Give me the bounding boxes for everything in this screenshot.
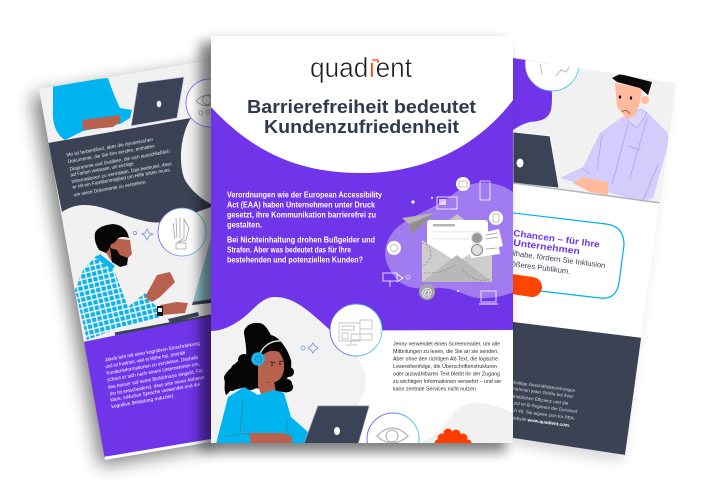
shape: grey bump bottom right: [418, 403, 513, 443]
text: Jenny paragraph: Jenny verwendet einen Screenreader, um alle: [393, 342, 500, 348]
logo: quadient: quadıent: [310, 52, 412, 83]
text: Jakob paragraph: ihn ist entscheidend, dass sein neuer Anbieter: [109, 375, 206, 397]
text: Jakob paragraph: Kundeninformationen zu verstehen. Deshalb: [106, 355, 199, 377]
text: Mo paragraph: er oft ein Familienmitglied um Hilfe bitten muss,: [72, 167, 171, 191]
illustration: woman with headset: [216, 323, 369, 444]
text: callout body: Teilhabe, fördern Sie Inklusion: [504, 248, 606, 270]
heading: Chancen: [514, 230, 600, 254]
text: Jenny paragraph: Lesereihenfolge, die Überschriftenstrukturen: [393, 363, 497, 370]
text: Jakob paragraph: [104, 341, 206, 410]
text: Jakob paragraph: klare, inklusive Sprache verwendet und die: [110, 382, 201, 403]
panel: purple text block: [83, 316, 211, 457]
shadow: middle page: [200, 42, 506, 452]
text: Jenny paragraph: Mitteilungen zu lesen, die Sie an sie senden.: [393, 349, 499, 355]
shape: orange blob: [434, 428, 472, 443]
icon: screen circle: [330, 304, 382, 356]
text: Jakob paragraph: das besser auf seine Bedürfnisse eingeht. Für: [108, 368, 204, 391]
text: Mo paragraph: Mo ist farbenblind, aber die dynamischen: [66, 137, 154, 158]
text: intro: bestehenden und potenziellen Kunden?: [227, 256, 363, 264]
shadow: right page: [513, 70, 670, 462]
shape: purple blob: [513, 55, 552, 130]
text: Mo paragraph: Diagramme und Grafiken, die sich ausschließlich: [69, 149, 171, 173]
text: intro: gesetzt, ihre Kommunikation barrierefrei zu: [227, 210, 376, 220]
text: intro: gestalten.: [227, 220, 262, 230]
text: Jakob paragraph: und ist frustriert, weil er Mühe hat, zentrale: [105, 350, 186, 370]
text: footer: Unternehmen jeder Größe bei ihrer: [502, 385, 574, 399]
text: Mo paragraph: um seine Dokumente zu verstehen.: [73, 179, 147, 198]
text: Mo paragraph: Informationen zu vermitteln. Das bedeutet, dass: [71, 161, 173, 185]
text: intro: Bei Nichteinhaltung drohen Bußgelder und: [227, 236, 375, 244]
shape: purple section: [211, 100, 513, 331]
shape: grey blob: [211, 297, 366, 443]
illustration: envelope: @: [421, 287, 433, 299]
panel: left page: [39, 62, 211, 460]
icon: hand circle: [158, 208, 206, 256]
icon: eye circle: [366, 412, 420, 443]
panel: dark text band: [48, 118, 211, 223]
panel: right page: [513, 58, 676, 455]
text: Jakob paragraph: schaut er sich nach einem Unternehmen um,: [107, 361, 200, 383]
text: footer: nach 40. Sie eignen sich für PEA-: [507, 407, 576, 421]
text: callout body: [513, 250, 605, 274]
illustration: woman at laptop continued: [53, 77, 184, 140]
illustration: man at computer: [75, 224, 211, 340]
heading: title: Barrierefreiheit bedeutet: [247, 96, 476, 117]
illustration: man at laptop: [513, 74, 668, 203]
panel: blue callout box: [513, 212, 625, 299]
icon: circle top: [524, 60, 580, 92]
text: Jenny paragraph: oder auswählbaren Text bleibt ihr der Zugang: [393, 372, 500, 378]
heading: title: [248, 100, 476, 133]
text: footer: betrieblichen Effizienz und die: [507, 393, 569, 406]
text: Jenny paragraph: Aber ohne den richtigen Alt-Text, die logische: [393, 356, 498, 362]
text: intro: Verordnungen wie der European Accessibility: [227, 190, 382, 200]
text: Jakob paragraph: kognitive Belastung reduziert.: [111, 393, 175, 410]
text: footer: und im B-Segment der Euronext: [512, 400, 578, 414]
text: Mo paragraph: Dokumente, die Sie ihm senden, enthalten: [68, 143, 155, 165]
panel: dark footer: [513, 322, 643, 455]
text: footer: Website www.quadient.com.: [510, 415, 571, 428]
text: footer: [513, 380, 578, 427]
text: Jenny paragraph: zu wichtigen Informationen verwehrt – und sie: [393, 379, 501, 385]
shadow: left page: [32, 66, 211, 466]
text: intro: Act (EAA) haben Unternehmen unter Druck: [227, 200, 375, 210]
text: Jenny paragraph: [393, 342, 501, 392]
heading: title: Kundenzufriedenheit: [264, 116, 459, 137]
text: intro: Strafen. Aber was bedeutet das für Ihre: [227, 246, 351, 254]
text: callout body: ein größeres Publikum.: [492, 257, 571, 276]
panel: middle page: [211, 36, 514, 465]
text: footer: nachhaltige Geschäftsbeziehungen: [504, 379, 576, 393]
icon: eye circle: [186, 78, 211, 128]
text: Mo paragraph: auf Farben verlassen, um wichtige: [70, 161, 134, 178]
button: orange: [505, 283, 532, 287]
text: Jakob paragraph: Jakob lebt mit einer kognitiven Einschränkung: [104, 341, 201, 363]
text: intro: [227, 190, 382, 264]
illustration: envelope: [383, 177, 514, 304]
heading: Chancen: Unternehmen: [513, 238, 581, 256]
heading: Chancen: Chancen – für Ihre: [513, 228, 600, 249]
text: Jenny paragraph: kann zentrale Services nicht nutzen: [393, 386, 476, 392]
text: Mo paragraph: [66, 137, 173, 198]
